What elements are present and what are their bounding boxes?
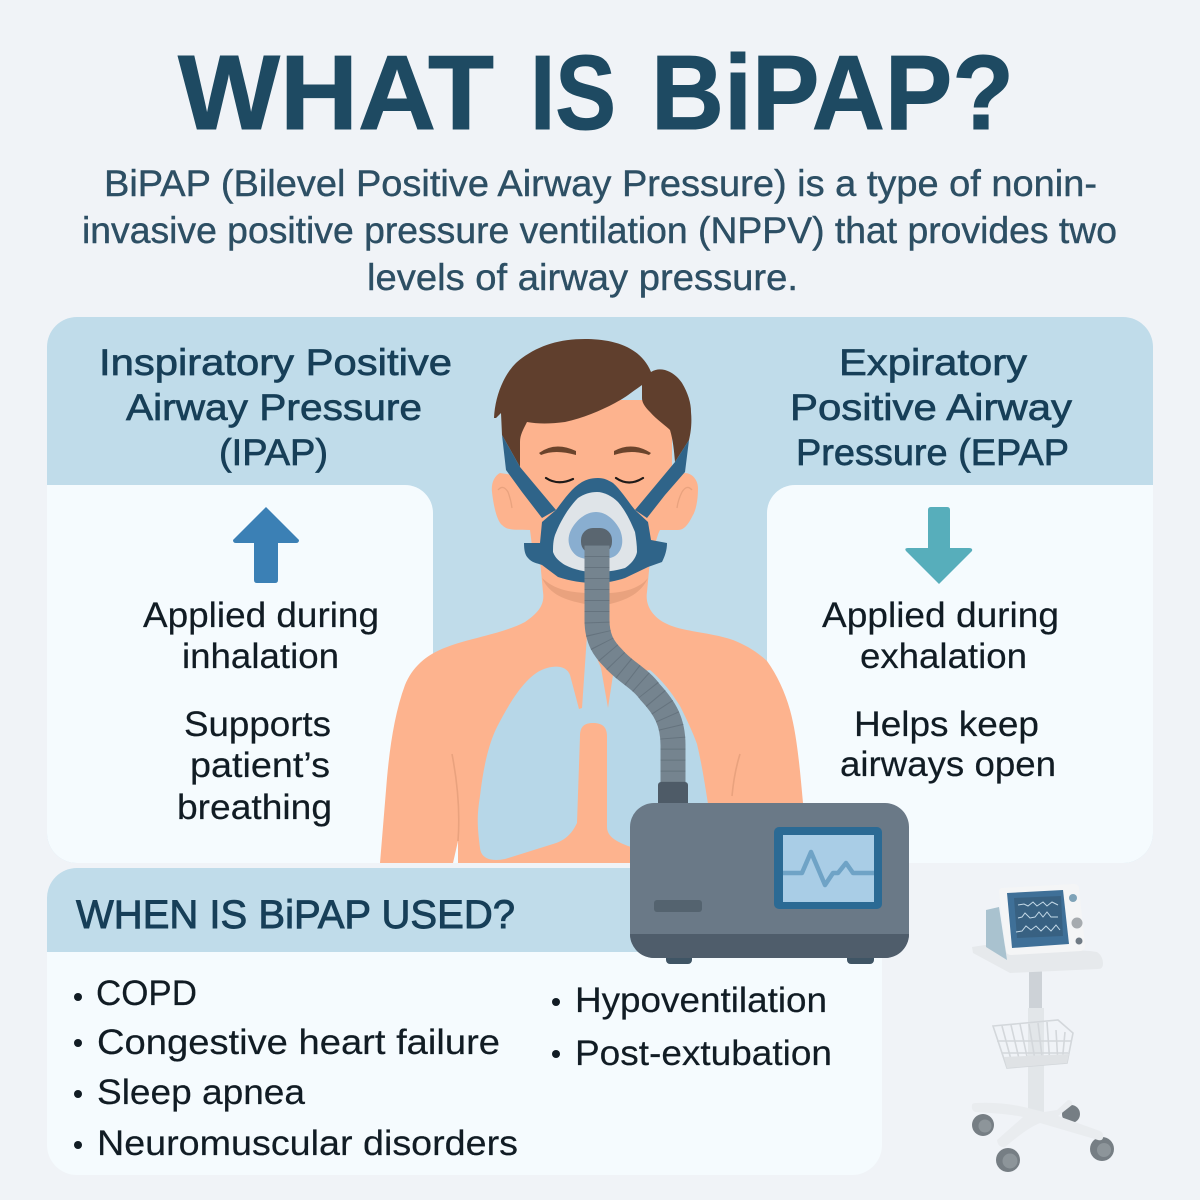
text: IPAP details: inhalation <box>182 637 339 676</box>
brows <box>539 446 576 455</box>
text: EPAP details: airways open <box>840 745 1056 784</box>
hair <box>494 339 691 467</box>
panel: when is BiPAP used <box>47 868 882 1175</box>
heading: EPAP: Expiratory <box>839 342 1028 383</box>
heading: IPAP: Airway Pressure <box>126 387 422 428</box>
heading: IPAP <box>99 342 452 473</box>
list: conditions left column: Neuromuscular disorders <box>97 1124 518 1163</box>
title: IS <box>530 34 616 152</box>
icon: down arrow <box>905 507 972 584</box>
closed eyes <box>546 478 643 482</box>
lungs <box>478 635 708 860</box>
intro text block <box>82 163 1117 298</box>
monitor back <box>986 907 1007 960</box>
list: conditions right column: Post-extubation <box>575 1034 832 1073</box>
text: IPAP details: patient’s <box>190 746 330 785</box>
pole <box>1029 970 1042 1012</box>
panel: EPAP card <box>767 485 1153 863</box>
title: WHAT <box>178 34 494 152</box>
list: conditions left column: Congestive heart failure <box>97 1023 500 1062</box>
heading: EPAP: Positive Airway <box>790 387 1073 428</box>
wheels <box>972 1114 994 1136</box>
icon: up arrow <box>233 507 299 583</box>
base <box>972 1100 1103 1147</box>
monitor <box>999 884 1085 955</box>
chest lines <box>452 754 740 841</box>
text: EPAP details <box>822 596 1059 784</box>
text: IPAP details: Supports <box>184 705 331 744</box>
breathing hose <box>597 545 673 785</box>
mask shell <box>524 478 667 583</box>
neck shadow <box>542 578 648 604</box>
heading: EPAP <box>790 342 1073 473</box>
heading: EPAP: Pressure (EPAP <box>796 432 1069 473</box>
list: conditions right column <box>552 981 832 1073</box>
heading: IPAP: Inspiratory Positive <box>99 342 452 383</box>
hose cap <box>581 528 612 554</box>
list: conditions left column <box>74 974 518 1163</box>
title <box>178 34 1014 152</box>
text: IPAP details: breathing <box>177 788 332 827</box>
text: EPAP details: Helps keep <box>854 705 1039 744</box>
intro text block: levels of airway pressure. <box>367 257 798 298</box>
waveform <box>783 852 874 885</box>
list: conditions left column: COPD <box>96 974 197 1013</box>
panel: pressure background <box>47 317 1153 863</box>
mask straps <box>502 435 556 518</box>
illustration: ventilator cart <box>972 884 1114 1172</box>
list: conditions right column: Hypoventilation <box>575 981 827 1020</box>
mask cushion <box>553 492 637 572</box>
tray <box>972 945 1103 973</box>
heading: when is BiPAP used: WHEN IS BiPAP USED? <box>76 893 515 937</box>
panel: IPAP card <box>47 485 433 863</box>
text: EPAP details: Applied during <box>822 596 1059 635</box>
list: conditions left column: Sleep apnea <box>97 1073 306 1112</box>
basket <box>993 1020 1073 1068</box>
intro text block: BiPAP (Bilevel Positive Airway Pressure) is a type of nonin- <box>104 163 1097 204</box>
text: IPAP details: Applied during <box>143 596 379 635</box>
title: BiPAP? <box>651 34 1014 152</box>
face <box>520 400 672 560</box>
illustration: BiPAP machine <box>630 782 909 964</box>
text: EPAP details: exhalation <box>860 637 1027 676</box>
ears <box>492 473 545 546</box>
heading: IPAP: (IPAP) <box>219 432 328 473</box>
text: IPAP details <box>143 596 379 827</box>
illustration: patient with mask <box>380 339 803 863</box>
intro text block: invasive positive pressure ventilation (NPPV) that provides two <box>82 210 1117 251</box>
patient torso <box>380 560 803 863</box>
